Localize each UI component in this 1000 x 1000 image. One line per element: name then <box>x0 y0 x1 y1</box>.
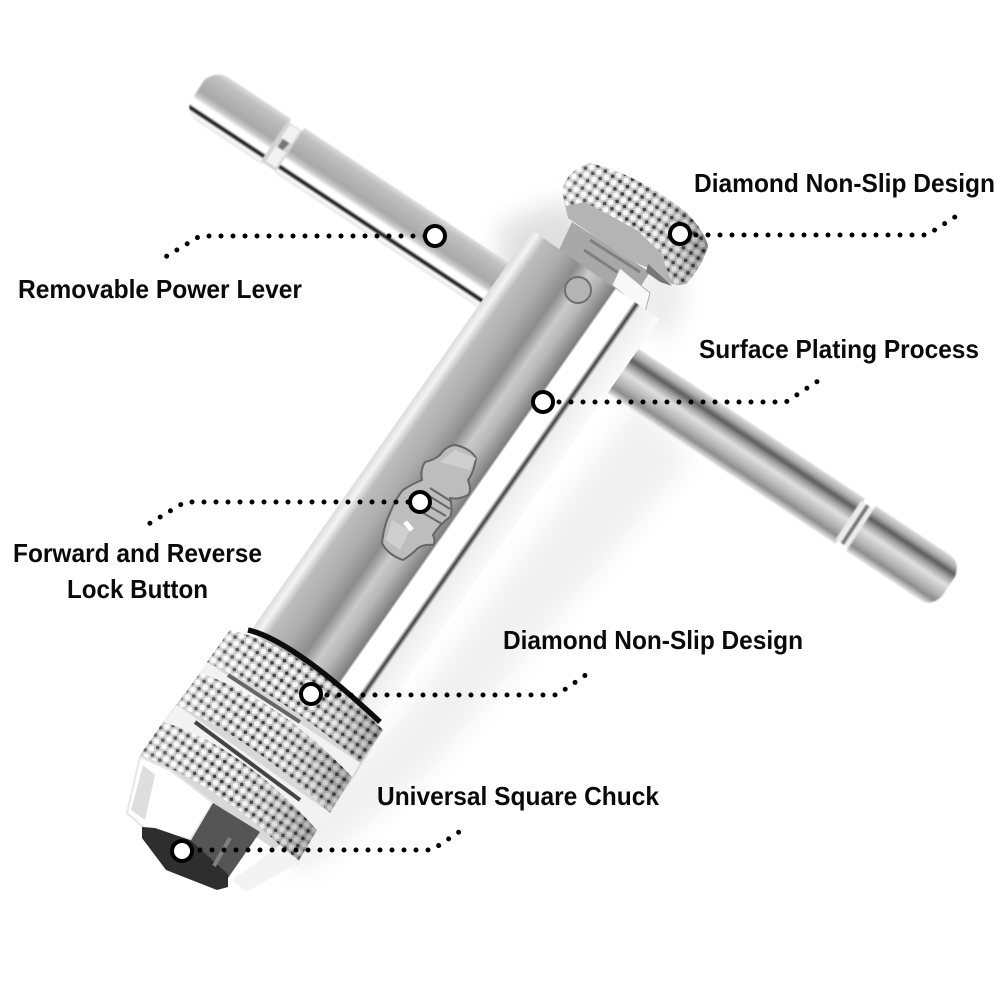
callout: Forward and Reverse Lock Button: Lock Button <box>67 574 208 604</box>
callout: Removable Power Lever <box>18 226 445 304</box>
left neck <box>261 121 304 172</box>
left lever tip <box>183 67 291 164</box>
tool: chuck groove shading <box>163 662 360 830</box>
tool: chuck nose cone <box>127 757 300 892</box>
knob knurling <box>562 163 708 285</box>
tool: main cylindrical body <box>250 230 659 721</box>
callout: Diamond Non-Slip Design (chuck) <box>301 625 803 704</box>
tool: forward and reverse lock button <box>382 445 476 560</box>
tool: knurled top knob <box>558 163 708 312</box>
left shaft <box>275 128 563 344</box>
callout: Removable Power Lever: Removable Power Lever <box>18 274 302 304</box>
right shaft <box>597 341 865 544</box>
knob bevel <box>562 192 678 285</box>
ring <box>612 268 650 312</box>
tool: T-handle power lever <box>183 67 963 609</box>
callout: Forward and Reverse Lock Button <box>13 492 430 604</box>
tool: chuck knurled band 1 <box>207 630 383 763</box>
tool: black ring above chuck <box>248 630 380 722</box>
tool: chuck base <box>140 630 383 865</box>
callout: Forward and Reverse Lock Button: Forward and Reverse <box>13 538 262 568</box>
callout: Universal Square Chuck: Universal Square Chuck <box>377 781 659 811</box>
right lever tip <box>846 506 963 609</box>
threaded neck <box>558 222 650 300</box>
tool: chuck knurled band 2 <box>177 673 352 813</box>
callout: Diamond Non-Slip Design (chuck): Diamond Non-Slip Design <box>503 625 803 655</box>
callout: Diamond Non-Slip Design (knob) <box>670 168 995 244</box>
right neck <box>836 501 875 549</box>
callout: Surface Plating Process: Surface Plating Process <box>699 334 979 364</box>
soft shadow and reflection around the tool <box>280 200 690 880</box>
callout: Universal Square Chuck <box>172 781 659 861</box>
callout: Surface Plating Process <box>533 334 979 412</box>
tool: chuck knurled band 3 <box>140 722 317 863</box>
tool: pin on body <box>565 277 591 303</box>
